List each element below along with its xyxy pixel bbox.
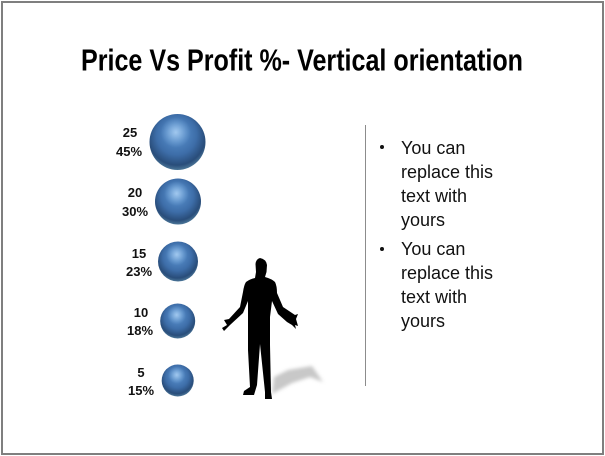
bullet 2: You can — [401, 239, 465, 259]
icon: silhouette of a man with open arms — [222, 258, 323, 399]
data point: 25 / 45%: 25 — [123, 125, 137, 140]
data point: 10 / 18%: 10 — [134, 305, 148, 320]
data point: 10 / 18% — [127, 304, 195, 338]
data point: 20 / 30% — [122, 178, 201, 224]
bullet 1: yours — [401, 210, 445, 230]
bubble chart: price vs profit — [116, 114, 206, 398]
data point: 20 / 30%: 20 — [128, 185, 142, 200]
data point: 25 / 45%: 45% — [116, 144, 142, 159]
data point: 5 / 15%: 5 — [137, 365, 145, 380]
vertical divider — [364, 125, 366, 386]
data point: 10 / 18%: 18% — [127, 323, 153, 338]
data point: 15 / 23%: 23% — [126, 264, 152, 279]
bullet 1: text with — [401, 186, 467, 206]
data point: 20 / 30%: 30% — [122, 204, 148, 219]
bullet 2: yours — [401, 311, 445, 331]
bullet 1: You can — [401, 138, 465, 158]
bullet 2: replace this — [401, 263, 493, 283]
data point: 15 / 23% — [126, 242, 198, 282]
data point: 15 / 23%: 15 — [132, 246, 146, 261]
data point: 5 / 15% — [128, 364, 194, 398]
bullet 2: text with — [401, 287, 467, 307]
data point: 5 / 15%: 15% — [128, 383, 154, 398]
figure shadow — [272, 366, 323, 394]
data point: 25 / 45% — [116, 114, 206, 170]
bullet 2 — [380, 239, 493, 331]
bullet 1 — [380, 138, 493, 230]
bullet 1: replace this — [401, 162, 493, 182]
figure body — [222, 258, 298, 399]
text block: bullet list — [380, 138, 493, 331]
